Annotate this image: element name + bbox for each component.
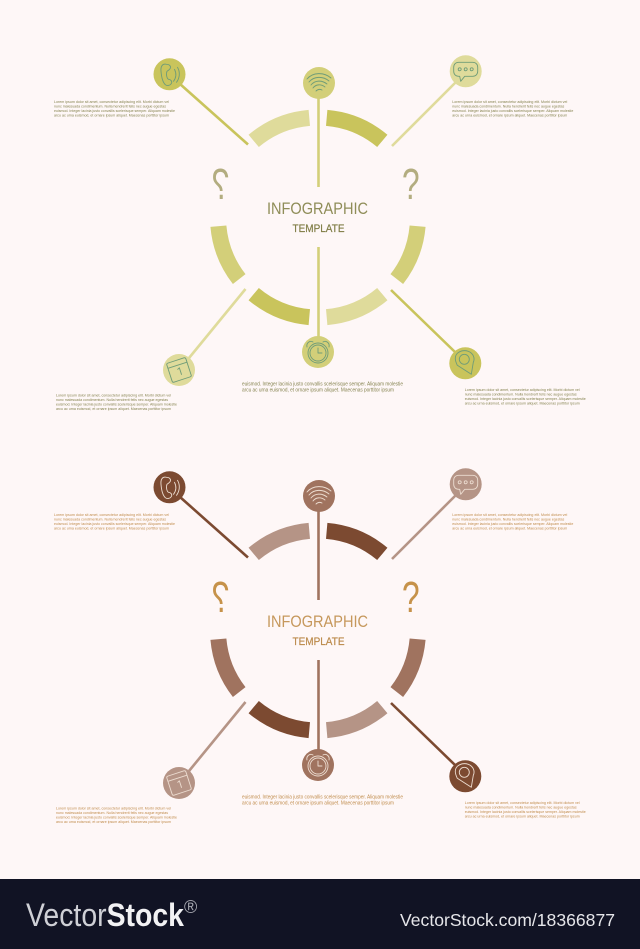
text block: bottom right: euismod. Integer lacinia justo convallis scelerisque semper. Aliquam molestie: [465, 809, 586, 814]
text block: bottom centre: arcu ac urna euismod, et ornare ipsum aliquet. Maecenas porttitor ipsum: [242, 388, 394, 394]
text block: bottom left: [56, 806, 178, 824]
text block: bottom right: [465, 387, 586, 405]
text block: top right: arcu ac urna euismod, et ornare ipsum aliquet. Maecenas porttitor ipsum: [452, 112, 568, 118]
text block: top left: nunc malesuada condimentum. Nulla hendrerit felis nec augue egestas: [54, 516, 166, 522]
footer bar: [0, 879, 640, 949]
text block: top left: [54, 99, 176, 118]
text block: top left: euismod. Integer lacinia justo convallis scelerisque semper. Aliquam molestie: [54, 108, 176, 113]
text block: top right: euismod. Integer lacinia justo convallis scelerisque semper. Aliquam molestie: [452, 521, 574, 526]
icon: phone handset: [154, 58, 186, 90]
registered mark: ®: [184, 897, 197, 917]
text block: top left: Lorem ipsum dolor sit amet, consectetur adipiscing elit. Morbi dictum vel: [54, 99, 169, 104]
ring of arc segments: [218, 531, 418, 730]
panel: olive infographic: [54, 55, 586, 411]
text block: top right: [452, 512, 574, 530]
text block: bottom right: arcu ac urna euismod, et ornare ipsum aliquet. Maecenas porttitor ipsum: [465, 400, 580, 405]
text block: bottom left: arcu ac urna euismod, et ornare ipsum aliquet. Maecenas porttitor ipsum: [56, 819, 172, 824]
text block: bottom centre: euismod. Integer lacinia justo convallis scelerisque semper. Aliquam molestie: [242, 794, 403, 800]
question mark left: ?: [212, 160, 230, 209]
icon: alarm clock: [302, 336, 334, 368]
text block: top left: euismod. Integer lacinia justo convallis scelerisque semper. Aliquam molestie: [54, 521, 176, 526]
icon: phone handset: [154, 471, 186, 503]
text block: bottom centre: [242, 794, 403, 806]
text block: bottom left: Lorem ipsum dolor sit amet, consectetur adipiscing elit. Morbi dictum vel: [56, 392, 171, 398]
text block: top left: [54, 512, 176, 530]
text block: bottom left: nunc malesuada condimentum. Nulla hendrerit felis nec augue egestas: [56, 397, 168, 402]
text block: bottom right: nunc malesuada condimentum. Nulla hendrerit felis nec augue egestas: [465, 804, 577, 809]
image id: VectorStock.com/18366877: [400, 910, 615, 930]
icon: calendar: [163, 354, 195, 386]
text block: bottom right: [465, 800, 586, 818]
icon: map pin: [449, 347, 481, 379]
text block: top right: Lorem ipsum dolor sit amet, consectetur adipiscing elit. Morbi dictum vel: [452, 99, 567, 104]
panel: brown infographic: [54, 468, 586, 824]
subtitle: TEMPLATE: [292, 636, 344, 648]
text block: bottom right: Lorem ipsum dolor sit amet, consectetur adipiscing elit. Morbi dictum vel: [465, 800, 580, 805]
title: INFOGRAPHIC: [267, 613, 368, 631]
text block: bottom left: arcu ac urna euismod, et ornare ipsum aliquet. Maecenas porttitor ipsum: [56, 406, 172, 411]
ring of arc segments: [218, 118, 418, 317]
text block: bottom centre: euismod. Integer lacinia justo convallis scelerisque semper. Aliquam molestie: [242, 382, 403, 388]
icon: wifi: [303, 480, 335, 512]
text block: bottom right: nunc malesuada condimentum. Nulla hendrerit felis nec augue egestas: [465, 391, 577, 396]
subtitle: TEMPLATE: [292, 223, 344, 235]
text block: top right: [452, 99, 574, 118]
text block: top left: arcu ac urna euismod, et ornare ipsum aliquet. Maecenas porttitor ipsum: [54, 112, 170, 118]
icon: map pin: [449, 760, 481, 792]
icon: chat bubble: [450, 55, 482, 87]
connector lines: [180, 495, 456, 771]
logo wordmark: VectorStock: [26, 897, 184, 933]
icon: alarm clock: [302, 749, 334, 781]
text block: bottom right: Lorem ipsum dolor sit amet, consectetur adipiscing elit. Morbi dictum vel: [465, 387, 580, 392]
icon: calendar: [163, 767, 195, 799]
question mark right: ?: [402, 573, 420, 622]
text block: bottom right: arcu ac urna euismod, et ornare ipsum aliquet. Maecenas porttitor ipsum: [465, 813, 580, 818]
text block: top right: euismod. Integer lacinia justo convallis scelerisque semper. Aliquam molestie: [452, 108, 574, 113]
icon: wifi: [303, 67, 335, 99]
text block: bottom centre: arcu ac urna euismod, et ornare ipsum aliquet. Maecenas porttitor ipsum: [242, 800, 394, 806]
text block: top right: arcu ac urna euismod, et ornare ipsum aliquet. Maecenas porttitor ipsum: [452, 526, 568, 530]
text block: bottom left: euismod. Integer lacinia justo convallis scelerisque semper. Aliquam molestie: [56, 814, 178, 820]
icon: chat bubble: [450, 468, 482, 500]
text block: bottom left: nunc malesuada condimentum. Nulla hendrerit felis nec augue egestas: [56, 810, 168, 815]
text block: bottom centre: [242, 382, 403, 394]
text block: top right: nunc malesuada condimentum. Nulla hendrerit felis nec augue egestas: [452, 516, 564, 522]
text block: top left: arcu ac urna euismod, et ornare ipsum aliquet. Maecenas porttitor ipsum: [54, 526, 170, 530]
question mark right: ?: [402, 160, 420, 209]
question mark left: ?: [212, 573, 230, 622]
text block: bottom left: Lorem ipsum dolor sit amet, consectetur adipiscing elit. Morbi dictum vel: [56, 806, 171, 810]
text block: bottom left: euismod. Integer lacinia justo convallis scelerisque semper. Aliquam molestie: [56, 402, 178, 406]
connector lines: [180, 82, 456, 358]
text block: bottom left: [56, 392, 178, 411]
text block: top left: Lorem ipsum dolor sit amet, consectetur adipiscing elit. Morbi dictum vel: [54, 512, 169, 517]
title: INFOGRAPHIC: [267, 200, 368, 218]
text block: top left: nunc malesuada condimentum. Nulla hendrerit felis nec augue egestas: [54, 104, 166, 108]
text block: bottom right: euismod. Integer lacinia justo convallis scelerisque semper. Aliquam molestie: [465, 396, 586, 401]
text block: top right: nunc malesuada condimentum. Nulla hendrerit felis nec augue egestas: [452, 104, 564, 108]
text block: top right: Lorem ipsum dolor sit amet, consectetur adipiscing elit. Morbi dictum vel: [452, 512, 567, 517]
